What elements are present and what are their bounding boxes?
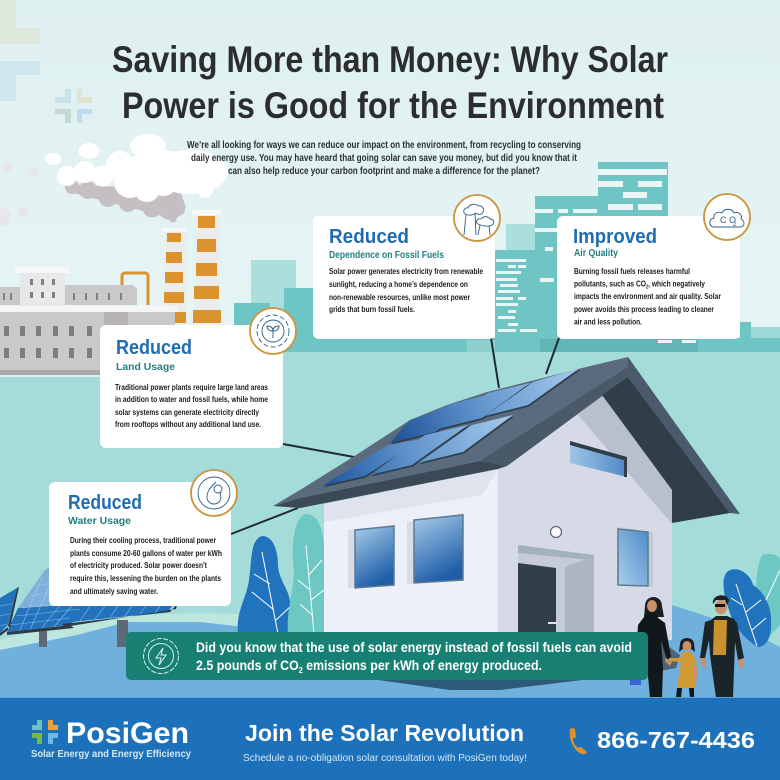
card: water usage xyxy=(49,470,237,606)
factory lower block xyxy=(0,306,178,377)
gable wall xyxy=(498,395,672,640)
callout text: Did you know that the use of solar energy instead of fossil fuels can avoid xyxy=(196,639,632,655)
icon: CO2 cloud xyxy=(704,194,750,240)
body: plants consume 20-60 gallons of water per kWh xyxy=(70,549,222,558)
leader lines xyxy=(231,338,559,534)
icon: water drops xyxy=(191,470,237,516)
woman xyxy=(637,597,672,698)
card: air quality xyxy=(557,194,750,339)
smoke cloud xyxy=(45,134,228,222)
icon: lightning badge xyxy=(144,638,178,674)
faded logo marks xyxy=(0,0,92,123)
icon: smokestacks xyxy=(454,195,500,241)
callout text xyxy=(196,639,632,675)
body: solar systems can generate electricity directly xyxy=(115,408,259,417)
chimney left xyxy=(162,228,186,323)
entry step xyxy=(655,640,680,672)
callout text: emissions per kWh of energy produced. xyxy=(303,657,542,673)
body xyxy=(70,536,222,596)
body: 2 xyxy=(646,284,648,290)
card: land usage xyxy=(100,308,296,448)
body: , which negatively xyxy=(648,280,705,288)
child xyxy=(669,638,697,698)
faded pink dots xyxy=(0,162,38,226)
icon: gear with sprout xyxy=(250,308,296,354)
icon: logo mark xyxy=(32,720,58,744)
body: and ultimately saving water. xyxy=(70,587,158,596)
body: power avoids this process leading to cleaner xyxy=(574,305,715,314)
body: require this, lessening the burden on the plants xyxy=(70,574,221,583)
intro text xyxy=(187,140,581,177)
subheading: Air Quality xyxy=(574,248,618,259)
family xyxy=(637,595,744,698)
PosiGen logo: PosiGen xyxy=(66,717,189,750)
body: Traditional power plants require large land areas xyxy=(115,383,268,392)
callout banner xyxy=(126,632,648,680)
power plant xyxy=(0,210,222,377)
body xyxy=(115,383,268,429)
body: from rooftops without any additional land use. xyxy=(115,420,261,429)
body: impacts the environment and air quality. Solar xyxy=(574,292,722,301)
body xyxy=(329,267,483,314)
PosiGen logo xyxy=(31,717,191,760)
porch and door xyxy=(518,545,594,640)
phone number: 866-767-4436 xyxy=(597,727,755,753)
body: air and less pollution. xyxy=(574,318,642,326)
body xyxy=(574,267,722,326)
body: Burning fossil fuels releases harmful xyxy=(574,267,690,276)
callout text: 2 xyxy=(299,666,303,675)
subheading: Water Usage xyxy=(68,516,131,527)
tree: left teal xyxy=(288,514,324,634)
body: pollutants, such as CO xyxy=(574,280,663,288)
shadow under house xyxy=(378,680,582,690)
body: of electricity produced. Solar power doesn’t xyxy=(70,561,207,570)
ground solar array xyxy=(0,567,177,647)
background ground xyxy=(0,350,780,700)
card: fossil fuels xyxy=(313,195,500,339)
intro text: daily energy use. You may have heard that going solar can save you money, but did you know that it xyxy=(191,153,578,164)
body: in addition to water and fossil fuels, while home xyxy=(115,395,268,404)
body: grids that burn fossil fuels. xyxy=(329,305,415,314)
side window xyxy=(617,527,653,587)
PosiGen logo: Solar Energy and Energy Efficiency xyxy=(31,748,191,760)
body: Solar power generates electricity from renewable xyxy=(329,267,483,276)
title: Power is Good for the Environment xyxy=(122,85,664,126)
teal city buildings xyxy=(0,162,780,352)
tree: left blue xyxy=(238,536,292,634)
heading: Reduced xyxy=(329,226,409,248)
heading: Improved xyxy=(573,226,657,248)
background sky xyxy=(0,0,780,352)
callout text: 2.5 pounds of CO xyxy=(196,657,312,673)
gable window xyxy=(570,441,627,477)
subheading: Dependence on Fossil Fuels xyxy=(329,250,444,261)
icon: CO2 cloud: 2 xyxy=(733,222,737,228)
call to action: Schedule a no-obligation solar consultation with PosiGen today! xyxy=(243,752,527,764)
front wall xyxy=(324,469,498,640)
blue step xyxy=(630,680,641,685)
heading: Reduced xyxy=(68,492,142,514)
chimney right xyxy=(192,210,222,323)
title xyxy=(112,39,668,126)
heading: Reduced xyxy=(116,337,192,359)
call to action: Join the Solar Revolution xyxy=(245,720,524,746)
roof xyxy=(273,357,740,523)
man xyxy=(700,595,744,698)
roof solar panels xyxy=(322,368,581,488)
wall lamp xyxy=(550,526,562,538)
title: Saving More than Money: Why Solar xyxy=(112,39,668,80)
footer bar xyxy=(0,697,780,780)
house xyxy=(273,357,740,690)
subheading: Land Usage xyxy=(116,362,175,373)
ground shapes xyxy=(0,605,780,700)
intro text: We’re all looking for ways we can reduce our impact on the environment, from recycling to conserving xyxy=(187,140,581,151)
call to action xyxy=(243,720,527,764)
body: non-renewable resources, unlike most power xyxy=(329,293,471,302)
pipe xyxy=(122,273,148,305)
body: sunlight, reducing a home’s dependence on xyxy=(329,280,468,289)
intro text: can also help reduce your carbon footprint and make a difference for the planet? xyxy=(228,166,540,177)
icon: phone xyxy=(570,728,587,754)
body: During their cooling process, traditional power xyxy=(70,536,217,545)
factory upper block xyxy=(0,267,137,306)
front windows xyxy=(348,513,463,588)
icon: CO2 cloud: C O xyxy=(720,215,736,225)
tree: right bush xyxy=(723,554,780,647)
